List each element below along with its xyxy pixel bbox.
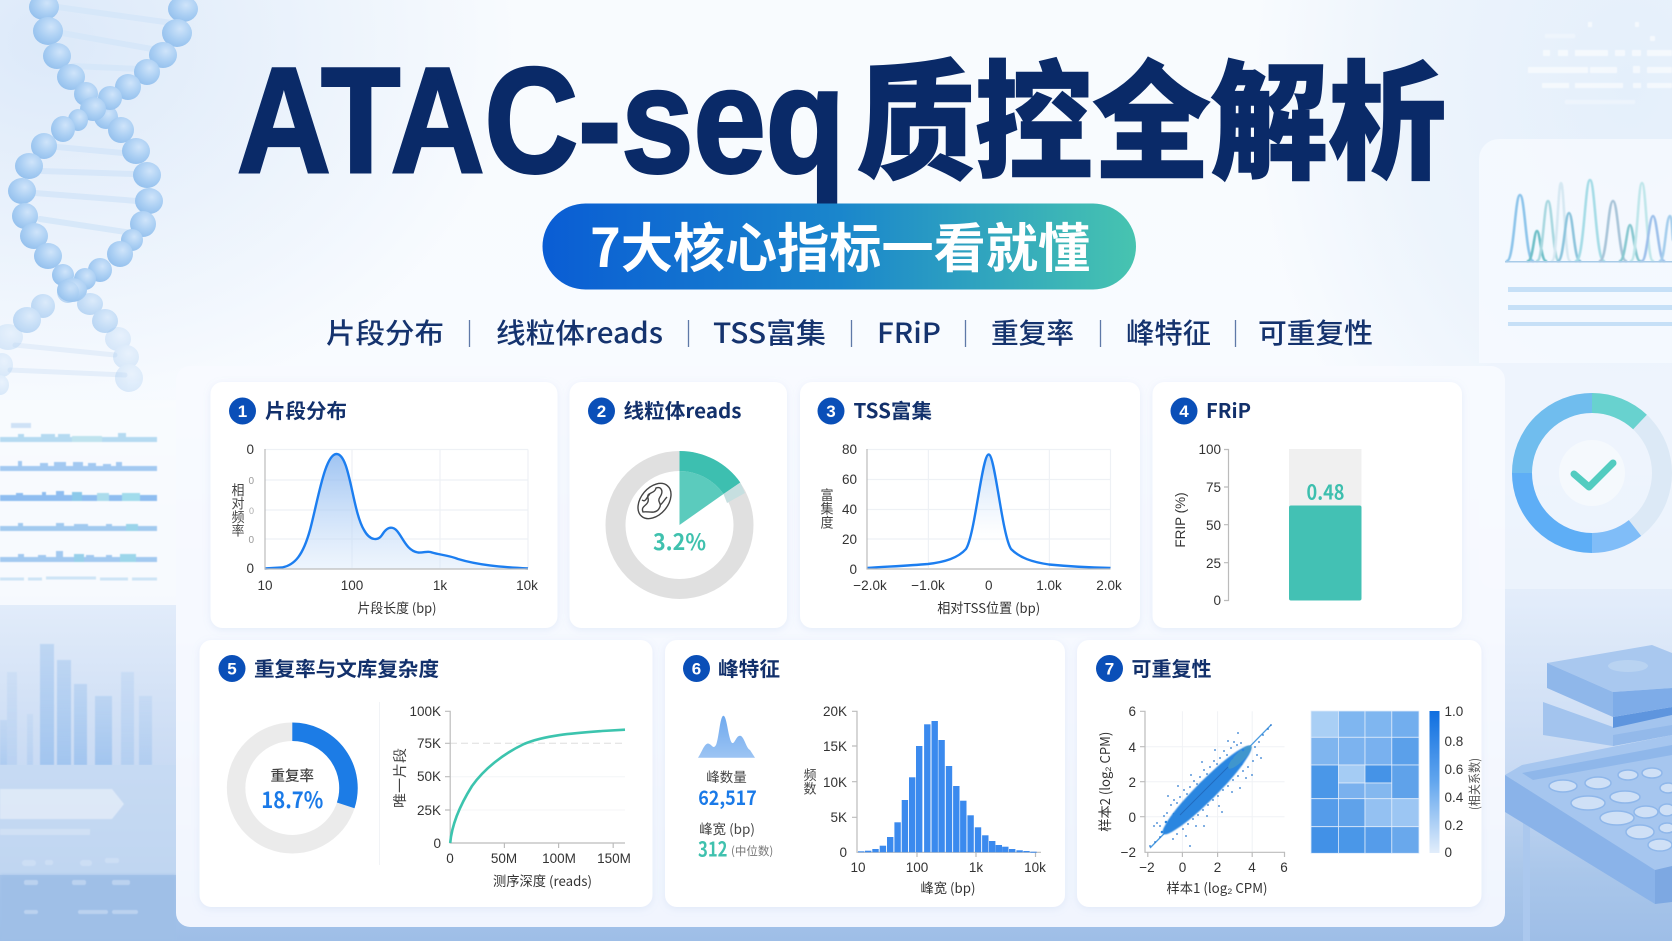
panel 3: TSS enrichment: 80 — [842, 442, 857, 457]
panel 1: fragment distribution: 1k — [433, 578, 447, 593]
panel 7: reproducibility: 4 — [1248, 860, 1256, 875]
panel 5: duplication and library complexity: 0 — [446, 851, 454, 866]
panel 4: FRiP: 100 — [1198, 442, 1221, 457]
panel 7: reproducibility: 6 — [1128, 704, 1136, 719]
panel 1: fragment distribution: 0 — [246, 561, 254, 576]
panel 3: TSS enrichment: 相对TSS位置 (bp) — [937, 597, 1040, 617]
panel 4: FRiP: FRIP (%) — [1173, 492, 1188, 548]
panel 7: reproducibility: 样本2 (log₂ CPM) — [1094, 732, 1114, 832]
panel 4: FRiP: 25 — [1206, 556, 1221, 571]
panel 6: peak features: 峰宽 (bp) — [920, 877, 976, 897]
decoration: left faded bars — [0, 644, 152, 765]
title — [237, 20, 1446, 205]
panel 5: duplication and library complexity: 唯一片段 — [390, 748, 410, 808]
panel 6: peak features — [665, 640, 1065, 907]
title: ATAC-seq — [237, 36, 845, 204]
panel 6: peak features: 15K — [823, 739, 847, 754]
panel 5: duplication and library complexity: 5 — [227, 660, 237, 678]
metric navigation line: TSS富集 — [713, 312, 826, 352]
panel 6: peak features: (中位数) — [731, 843, 773, 859]
panel 7: reproducibility: 0 — [1179, 860, 1186, 875]
panel 6: peak features: 6 — [692, 660, 701, 678]
panel 4: FRiP: 50 — [1206, 518, 1221, 533]
panel 5: duplication and library complexity: 150M — [597, 851, 631, 866]
panel 6: peak features: 1k — [969, 860, 983, 875]
panel 6: peak features: 312 — [698, 834, 728, 862]
panel 6: peak features: 10 — [850, 860, 866, 875]
panel 1: fragment distribution: 100 — [341, 578, 363, 593]
panel 3: TSS enrichment: TSS富集 — [854, 395, 932, 424]
panel 4: FRiP: FRiP — [1206, 395, 1251, 424]
panel 6: peak features: 62,517 — [698, 782, 757, 811]
panel 5: duplication and library complexity: 75K — [417, 736, 441, 751]
panel 5: duplication and library complexity: 18.7% — [261, 783, 323, 815]
colour scale legend: 0.2 — [1444, 818, 1463, 833]
panel 3: TSS enrichment — [800, 382, 1140, 628]
decoration: right chromatogram panel — [1479, 139, 1672, 363]
title: 质控全解析 — [857, 20, 1446, 205]
colour scale legend: 0 — [1444, 845, 1452, 860]
panel 3: TSS enrichment: 富集度 — [818, 487, 836, 529]
heatmap — [1311, 711, 1419, 853]
panel 7: reproducibility: 6 — [1280, 860, 1288, 875]
panel 7: reproducibility: 2 — [1128, 775, 1136, 790]
panel 5: duplication and library complexity: 50K — [417, 769, 441, 784]
metric navigation line: 片段分布 — [326, 312, 444, 352]
panel 3: TSS enrichment: −2.0k — [853, 578, 887, 593]
panel 4: FRiP: 0 — [1213, 593, 1221, 608]
colour scale legend: (相关系数) — [1464, 758, 1483, 810]
icon: peak silhouette — [698, 716, 755, 758]
decoration: right status ring with check — [1479, 363, 1672, 589]
panel 1: fragment distribution: 1 — [238, 402, 247, 421]
panel 6: peak features: 峰特征 — [718, 653, 780, 682]
panel 7: reproducibility: 4 — [1128, 740, 1136, 755]
panel 7: reproducibility: −2 — [1121, 845, 1136, 860]
panel 5: duplication and library complexity: 100M — [542, 851, 576, 866]
decoration: left lower device — [0, 765, 176, 941]
panel 7: reproducibility: −2 — [1139, 860, 1155, 875]
panel 5: duplication and library complexity: 测序深度 (reads) — [493, 870, 592, 890]
panel 3: TSS enrichment: 1.0k — [1036, 578, 1062, 593]
panel 1: fragment distribution: 10 — [257, 578, 273, 593]
panel 7: reproducibility: 样本1 (log₂ CPM) — [1166, 877, 1268, 897]
decoration: left signal tracks panel — [0, 400, 176, 605]
scatter plot — [1140, 711, 1284, 857]
panel 5: duplication and library complexity — [200, 640, 652, 907]
panel 5: duplication and library complexity: 25K — [417, 803, 441, 818]
colour scale legend: 0.6 — [1444, 762, 1463, 777]
panel 3: TSS enrichment: 0 — [849, 562, 857, 577]
colour scale legend: 1.0 — [1444, 704, 1463, 719]
decoration: top right dash pattern — [1528, 22, 1672, 104]
panel 1: fragment distribution: 相对频率 — [228, 483, 248, 537]
panel 2: mitochondrial reads: 2 — [597, 402, 606, 421]
panel 5: duplication and library complexity: 0 — [433, 836, 441, 851]
decoration: right lab plates — [1505, 645, 1672, 941]
panel 7: reproducibility: 2 — [1214, 860, 1221, 875]
panel 4: FRiP — [1152, 382, 1462, 628]
panel 3: TSS enrichment: 20 — [842, 532, 857, 547]
metric navigation line: 重复率 — [991, 312, 1074, 352]
panel 6: peak features: 5K — [830, 810, 847, 825]
icon: mitochondrion — [631, 477, 678, 525]
panel 6: peak features: 20K — [823, 704, 847, 719]
metric navigation line: 峰特征 — [1126, 312, 1211, 352]
panel 7: reproducibility: 0 — [1128, 810, 1136, 825]
colour scale legend — [1430, 704, 1483, 860]
panel 6: peak features: 10k — [1024, 860, 1046, 875]
metric navigation line: 线粒体reads — [496, 312, 663, 352]
metric navigation line — [326, 312, 1373, 352]
subtitle pill: 7大核心指标一看就懂 — [590, 207, 1090, 283]
panel 3: TSS enrichment: 2.0k — [1096, 578, 1122, 593]
panel 1: fragment distribution: 片段长度 (bp) — [358, 597, 436, 617]
panel 4: FRiP: 4 — [1179, 402, 1189, 421]
panel 5: duplication and library complexity: 重复率 — [271, 765, 314, 786]
decoration: DNA helix — [0, 0, 198, 395]
panel 1: fragment distribution: 10k — [516, 578, 538, 593]
panel 6: peak features: 频数 — [800, 768, 820, 795]
main panel — [176, 366, 1505, 927]
panel 6: peak features: 0 — [839, 845, 847, 860]
panel 6: peak features: 100 — [906, 860, 928, 875]
colour scale legend: 0.8 — [1444, 734, 1463, 749]
panel 3: TSS enrichment: 60 — [842, 472, 857, 487]
panel 2: mitochondrial reads: 线粒体reads — [624, 395, 742, 424]
metric navigation line: FRiP — [877, 312, 941, 352]
panel 1: fragment distribution: 0 — [246, 442, 254, 457]
panel 5: duplication and library complexity: 50M — [491, 851, 517, 866]
panel 7: reproducibility: 7 — [1105, 660, 1114, 678]
panel 1: fragment distribution: 片段分布 — [265, 395, 347, 424]
panel 6: peak features: 峰数量 — [706, 766, 747, 786]
panel 7: reproducibility — [1077, 640, 1483, 907]
panel 6: peak features: 峰宽 (bp) — [699, 818, 755, 838]
panel 3: TSS enrichment: 3 — [826, 402, 836, 421]
panel 3: TSS enrichment: −1.0k — [911, 578, 945, 593]
panel 1: fragment distribution — [210, 382, 558, 628]
panel 2: mitochondrial reads: 3.2% — [653, 525, 706, 557]
panel 5: duplication and library complexity: 100K — [409, 704, 441, 719]
panel 1: fragment distribution: 0 — [249, 506, 254, 516]
panel 4: FRiP: 75 — [1206, 480, 1221, 495]
metric navigation line: 可重复性 — [1258, 312, 1373, 352]
panel 3: TSS enrichment: 40 — [842, 502, 857, 517]
panel 7: reproducibility: 可重复性 — [1132, 653, 1212, 682]
panel 5: duplication and library complexity: 重复率与文库复杂度 — [254, 653, 439, 682]
panel 4: FRiP: 0.48 — [1306, 476, 1344, 506]
panel 1: fragment distribution: 0 — [248, 476, 254, 487]
panel 6: peak features: 10K — [823, 775, 847, 790]
decoration: upper slab — [1543, 645, 1672, 746]
panel 1: fragment distribution: 0 — [248, 535, 254, 546]
panel 2: mitochondrial reads — [570, 382, 787, 628]
panel 3: TSS enrichment: 0 — [985, 578, 992, 593]
colour scale legend: 0.4 — [1444, 790, 1464, 805]
